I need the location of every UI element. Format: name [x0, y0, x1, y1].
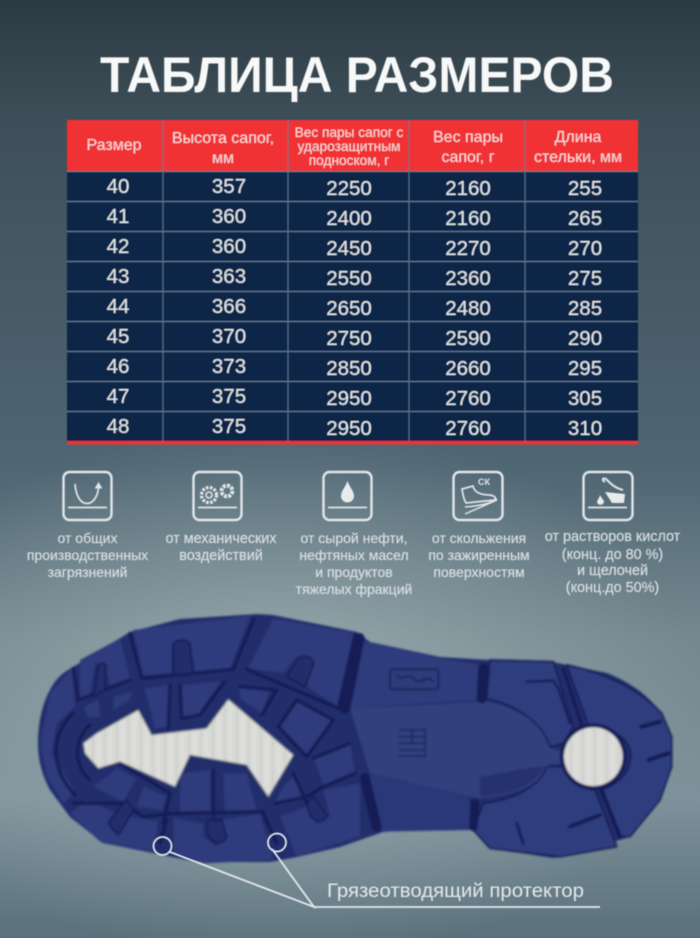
column: вес [445, 177, 491, 440]
heel grooves [345, 638, 668, 843]
text: mechanical impact [165, 531, 277, 564]
icon: oil drop [324, 472, 372, 520]
text: acids and alkalis: (конц.до 50%) [566, 580, 659, 596]
tread lugs [40, 616, 360, 863]
icon: anti-slip boot [454, 472, 502, 520]
column: длина стельки [568, 177, 602, 440]
callout circles and leader lines [154, 834, 600, 907]
column: вес с подноском: 2450 [326, 237, 372, 260]
icon: acid flask [584, 472, 632, 520]
column: высота: 360 [212, 205, 246, 228]
column: размер: 42 [107, 235, 129, 258]
column: высота: 360 [212, 235, 246, 258]
text: general contamination: загрязнений [48, 564, 127, 580]
text: anti-slip: по зажиренным [428, 547, 530, 563]
column: размер: 43 [107, 265, 129, 288]
column: вес: 2160 [445, 207, 491, 230]
text: crude oil: от сырой нефти, [301, 530, 407, 546]
column: размер: 47 [107, 385, 129, 408]
shank plate [350, 702, 563, 798]
column: высота: 375 [212, 415, 246, 438]
title: ТАБЛИЦА РАЗМЕРОВ [100, 47, 614, 103]
table header row: стельки, мм [534, 149, 622, 166]
column: высота [212, 175, 246, 438]
instep panels [350, 640, 480, 708]
column: вес с подноском: 2950 [326, 387, 372, 410]
column: длина стельки: 310 [568, 417, 602, 440]
column: размер [107, 175, 129, 438]
column: вес с подноском: 2850 [326, 357, 372, 380]
boot sole photo [38, 614, 672, 863]
callout: tread [154, 834, 600, 907]
table header row: ударозащитным [298, 139, 400, 154]
text: acids and alkalis: и щелочей [577, 563, 648, 579]
column: вес: 2660 [445, 357, 491, 380]
column: размер: 40 [107, 175, 129, 198]
table bottom red rule [67, 441, 638, 444]
column: вес с подноском: 2650 [326, 297, 372, 320]
text: mechanical impact: от механических [165, 531, 277, 547]
column: длина стельки: 295 [568, 357, 602, 380]
text: crude oil [296, 530, 412, 597]
size table [67, 120, 638, 444]
text: general contamination: от общих [58, 530, 117, 546]
icon: mechanical impact [194, 472, 242, 520]
text: general contamination: производственных [27, 547, 148, 563]
tread grooves [56, 618, 355, 843]
text: crude oil: и продуктов [315, 564, 393, 580]
sole moulded marks [390, 669, 438, 756]
heel lugs [473, 660, 672, 857]
text: general contamination [27, 530, 148, 580]
column: длина стельки: 270 [568, 237, 602, 260]
column: длина стельки: 305 [568, 387, 602, 410]
callout label: Грязеотводящий протектор [327, 881, 584, 902]
table header row [67, 120, 638, 171]
column: вес: 2760 [445, 417, 491, 440]
text: mechanical impact: воздействий [179, 548, 263, 564]
column: вес с подноском: 2400 [326, 207, 372, 230]
white insert, forefoot [83, 699, 293, 797]
column: длина стельки: 290 [568, 327, 602, 350]
text: acids and alkalis: (конц. до 80 %) [562, 547, 663, 563]
column: размер: 48 [107, 415, 129, 438]
table header row: сапог, г [441, 149, 495, 166]
column: вес: 2360 [445, 267, 491, 290]
column: вес: 2590 [445, 327, 491, 350]
column: вес с подноском: 2950 [326, 417, 372, 440]
column: высота: 375 [212, 385, 246, 408]
table header row: Длина [555, 129, 602, 146]
column: размер: 41 [107, 205, 129, 228]
column: вес: 2760 [445, 387, 491, 410]
column: длина стельки: 285 [568, 297, 602, 320]
instep and heel [345, 638, 672, 857]
tread slots [93, 640, 327, 843]
text: acids and alkalis: от растворов кислот [545, 529, 681, 545]
text: anti-slip: поверхностям [433, 564, 525, 580]
column: высота: 366 [212, 295, 246, 318]
table header row: подноском, г [309, 153, 389, 168]
column: вес с подноском: 2750 [326, 327, 372, 350]
text: crude oil: нефтяных масел [299, 547, 409, 563]
column: вес с подноском [326, 177, 372, 440]
column: вес: 2480 [445, 297, 491, 320]
icon: general contamination [64, 472, 112, 520]
column: размер: 45 [107, 325, 129, 348]
table header row: Размер [86, 137, 142, 154]
column: размер: 46 [107, 355, 129, 378]
forefoot tread [40, 616, 360, 863]
column: длина стельки: 275 [568, 267, 602, 290]
table header row: мм [212, 150, 234, 167]
text: crude oil: тяжелых фракций [296, 581, 412, 597]
table body [67, 120, 638, 441]
column: вес: 2160 [445, 177, 491, 200]
column: высота: 373 [212, 355, 246, 378]
protection features row [27, 472, 681, 597]
icon: anti-slip boot: СК [478, 477, 490, 487]
heel insert circle [564, 727, 623, 786]
text: anti-slip [428, 530, 530, 580]
column: вес: 2270 [445, 237, 491, 260]
column: длина стельки: 265 [568, 207, 602, 230]
table header row: Вес пары [433, 129, 503, 146]
text: anti-slip: от скольжения [432, 530, 526, 546]
column: вес с подноском: 2250 [326, 177, 372, 200]
column: высота: 357 [212, 175, 246, 198]
table header row: Вес пары сапог с [295, 125, 404, 140]
heel insert ring [560, 723, 627, 790]
column: вес с подноском: 2550 [326, 267, 372, 290]
column: длина стельки: 255 [568, 177, 602, 200]
column: высота: 363 [212, 265, 246, 288]
text: acids and alkalis [545, 529, 681, 596]
table header row: Высота сапог, [172, 130, 274, 147]
column: размер: 44 [107, 295, 129, 318]
column: высота: 370 [212, 325, 246, 348]
sole outline [38, 614, 672, 862]
